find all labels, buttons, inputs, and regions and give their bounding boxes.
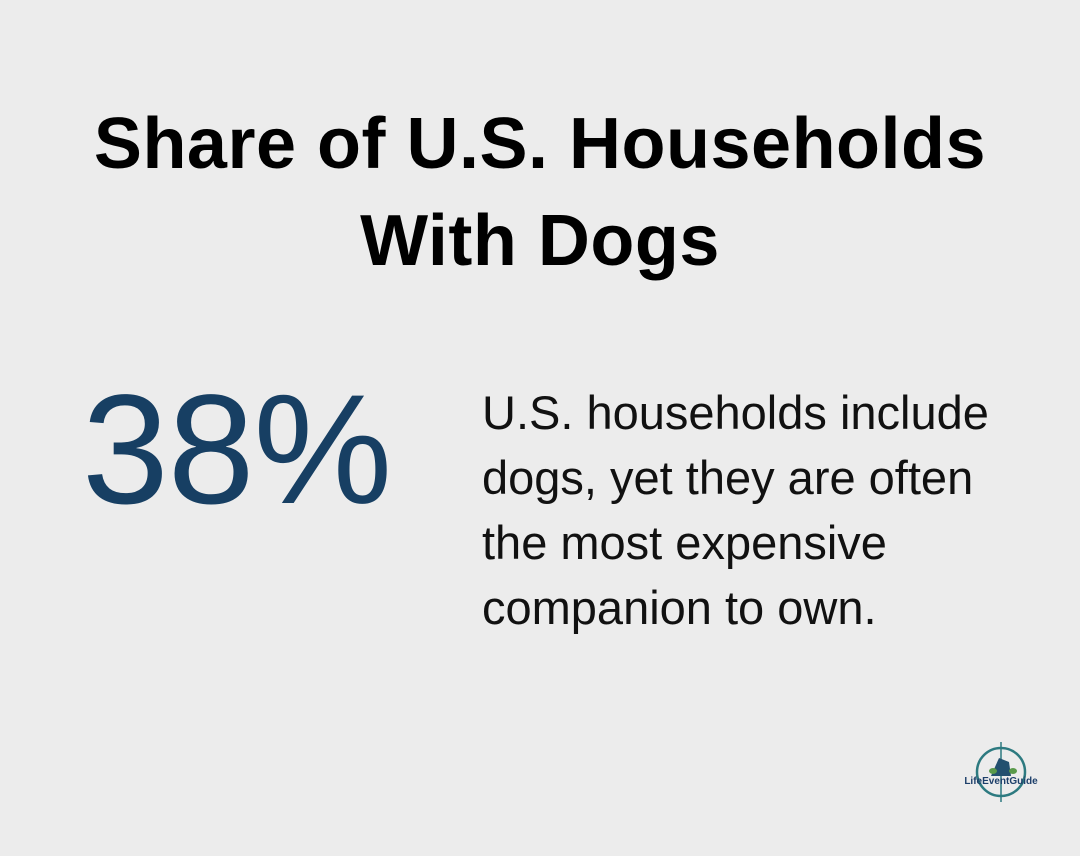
logo: LifeEventGuide (965, 776, 1038, 787)
title (94, 104, 986, 281)
logo (965, 742, 1038, 802)
description text: dogs, yet they are often (482, 451, 973, 504)
description text: companion to own. (482, 581, 877, 634)
big stat: 38% (82, 363, 391, 537)
description text: the most expensive (482, 516, 887, 569)
title: Share of U.S. Households (94, 104, 986, 184)
title: With Dogs (360, 201, 720, 281)
description text (482, 386, 989, 634)
description text: U.S. households include (482, 386, 989, 439)
